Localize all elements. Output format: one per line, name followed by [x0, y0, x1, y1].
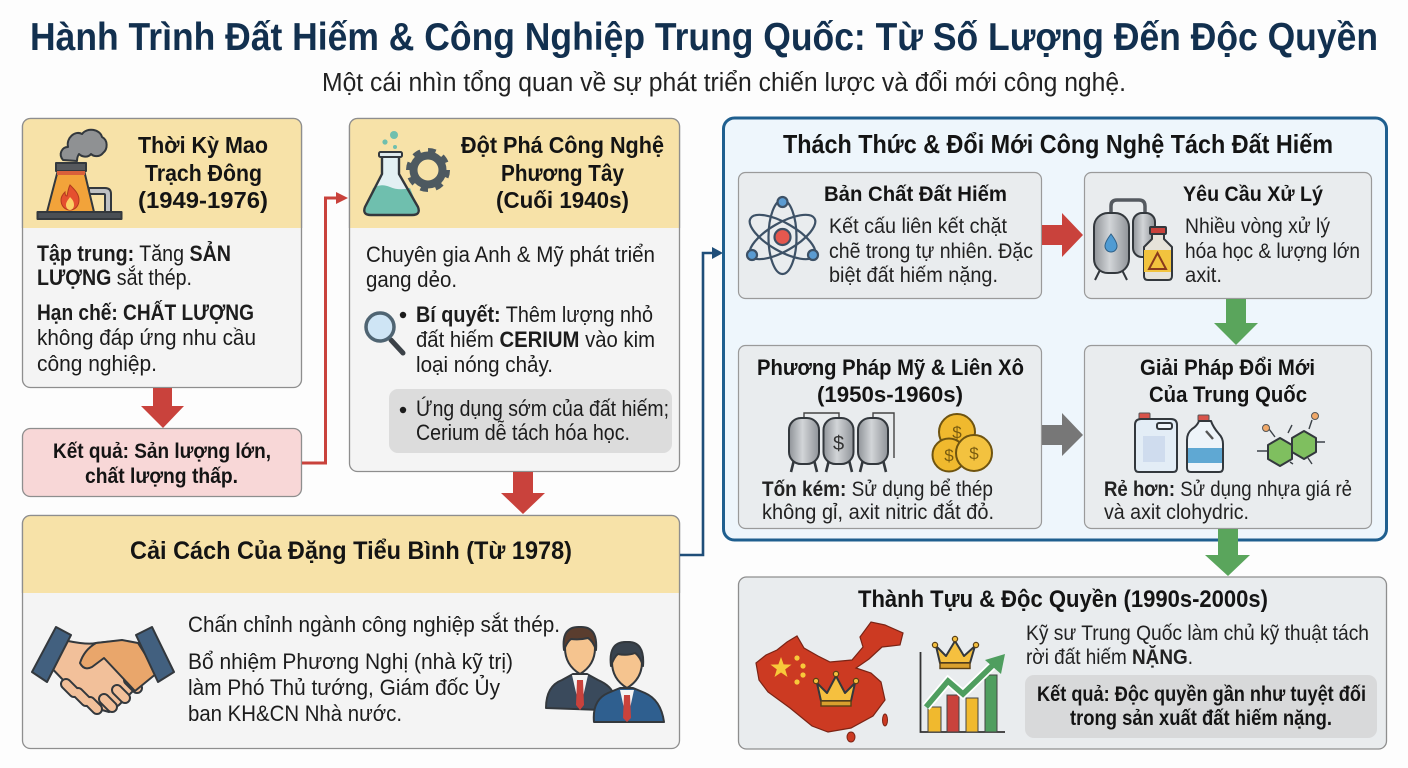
- panel: processing requirements: [1084, 172, 1372, 298]
- icon: China map with crown: [756, 622, 903, 742]
- panel: western breakthrough: [350, 118, 680, 472]
- heading: separation challenges: Thách Thức & Đổi Mới Công Nghệ Tách Đất Hiếm: [783, 129, 1333, 159]
- icon: tanks and acid bottle: [1094, 200, 1172, 280]
- text block: engineers master separation: rời đất hiếm NẶNG.: [1026, 646, 1193, 669]
- text block: cheaper: [1104, 478, 1352, 524]
- callout: early application: Cerium dễ tách hóa học.: [416, 420, 630, 445]
- panel: Mao era: [22, 118, 302, 388]
- icon: handshake: [32, 627, 174, 712]
- callout: monopoly result: trong sản xuất đất hiếm nặng.: [1070, 706, 1332, 730]
- icon: two officials: [546, 627, 664, 722]
- icon: magnifier: [366, 313, 403, 353]
- text block: focus and limits: Hạn chế: CHẤT LƯỢNG: [37, 300, 254, 325]
- text block: focus and limits: LƯỢNG sắt thép.: [37, 265, 192, 290]
- panel: result low quality: Kết quả: Sản lượng lớn,: [53, 439, 271, 463]
- arrow: result to western breakthrough: [302, 192, 348, 463]
- icon: steel tanks: [789, 413, 894, 472]
- panel: separation challenges and innovation: [724, 118, 1386, 540]
- heading: Deng reform: Cải Cách Của Đặng Tiểu Bình (Từ 1978): [130, 537, 572, 565]
- text block: engineers master separation: [1026, 622, 1369, 669]
- text block: steel and Fang Yi: Bổ nhiệm Phương Nghị (nhà kỹ trị): [188, 649, 513, 674]
- text block: acid rounds: axit.: [1185, 264, 1222, 287]
- text block: cerium secret: [400, 302, 655, 377]
- text block: costly: [762, 478, 994, 524]
- panel: Deng reform: [22, 516, 680, 748]
- heading: western breakthrough: [461, 132, 664, 213]
- heading: achievements: Thành Tựu & Độc Quyền (1990s-2000s): [858, 586, 1268, 613]
- icon: steel tanks: $: [833, 433, 844, 455]
- text block: engineers master separation: Kỹ sư Trung Quốc làm chủ kỹ thuật tách: [1026, 622, 1369, 645]
- heading: Mao era: Thời Kỳ Mao: [138, 132, 268, 158]
- text block: cheaper: Rẻ hơn: Sử dụng nhựa giá rẻ: [1104, 478, 1352, 501]
- icon: gold coins: $: [944, 446, 954, 465]
- text block: acid rounds: [1185, 215, 1360, 287]
- panel: result low quality: [22, 428, 302, 496]
- text block: focus and limits: [37, 241, 256, 376]
- icon: gold coins: $: [952, 423, 962, 442]
- heading: US and Soviet method: [757, 355, 1024, 407]
- arrow: breakthrough to reform: [501, 472, 545, 514]
- callout: early application: Ứng dụng sớm của đất hiếm;: [416, 396, 669, 421]
- text block: focus and limits: Tập trung: Tăng SẢN: [37, 241, 231, 266]
- panel: Chinese innovation: [1084, 346, 1372, 528]
- icon: molecule: [1257, 412, 1325, 466]
- arrow: Chinese solution to achievements: [1205, 529, 1250, 576]
- text block: cerium secret: Bí quyết: Thêm lượng nhỏ: [416, 302, 653, 327]
- icon: factory with smoke and flame: [38, 130, 122, 219]
- arrow: nature to processing: [1042, 213, 1083, 257]
- icon: plastic jugs: [1135, 413, 1223, 472]
- heading: processing requirements: Yêu Cầu Xử Lý: [1183, 182, 1323, 206]
- heading: nature of rare earths: Bản Chất Đất Hiếm: [824, 182, 1007, 206]
- text block: steel and Fang Yi: ban KH&CN Nhà nước.: [188, 701, 402, 726]
- heading: Chinese innovation: Giải Pháp Đổi Mới: [1140, 355, 1315, 380]
- text block: steel and Fang Yi: Chấn chỉnh ngành công nghiệp sắt thép.: [188, 612, 560, 637]
- icon: atom: [743, 197, 822, 274]
- text block: steel and Fang Yi: làm Phó Thủ tướng, Giám đốc Ủy: [188, 675, 500, 700]
- heading: Mao era: Trạch Đông: [145, 160, 262, 186]
- panel: nature of rare earths: [738, 172, 1042, 298]
- text block: acid rounds: Nhiều vòng xử lý: [1185, 215, 1330, 238]
- panel: achievements and monopoly: [738, 577, 1386, 749]
- subtitle: Một cái nhìn tổng quan về sự phát triển chiến lược và đổi mới công nghệ.: [322, 69, 1126, 97]
- icon: flask and gear: [364, 131, 448, 215]
- text block: tight bonds: biệt đất hiếm nặng.: [829, 264, 998, 287]
- text block: focus and limits: không đáp ứng nhu cầu: [37, 325, 256, 350]
- arrow: Mao era to result: [141, 388, 184, 428]
- text block: ductile iron: gang dẻo.: [366, 267, 457, 292]
- heading: US and Soviet method: (1950s-1960s): [817, 382, 963, 407]
- arrow: processing to Chinese solution: [1214, 299, 1258, 345]
- arrow: US method to Chinese solution: [1042, 413, 1083, 456]
- panel: result low quality: chất lượng thấp.: [85, 464, 238, 488]
- text block: ductile iron: Chuyên gia Anh & Mỹ phát triển: [366, 242, 655, 267]
- text block: tight bonds: chẽ trong tự nhiên. Đặc: [829, 240, 1033, 263]
- heading: western breakthrough: Phương Tây: [501, 160, 624, 186]
- heading: Mao era: [138, 132, 268, 213]
- icon: gold coins: [932, 414, 992, 472]
- heading: Chinese innovation: Của Trung Quốc: [1149, 382, 1307, 407]
- text block: cerium secret: loại nóng chảy.: [416, 352, 553, 377]
- text block: ductile iron: [366, 242, 655, 292]
- text block: cerium secret: đất hiếm CERIUM vào kim: [416, 327, 655, 352]
- text block: tight bonds: Kết cấu liên kết chặt: [829, 215, 1007, 238]
- arrow: reform to separation challenge: [680, 247, 723, 555]
- heading: US and Soviet method: Phương Pháp Mỹ & Liên Xô: [757, 355, 1024, 380]
- text block: acid rounds: hóa học & lượng lớn: [1185, 240, 1360, 263]
- text block: costly: không gỉ, axit nitric đắt đỏ.: [762, 501, 994, 524]
- text block: steel and Fang Yi: [188, 612, 560, 726]
- text block: focus and limits: công nghiệp.: [37, 351, 157, 376]
- text block: tight bonds: [829, 215, 1033, 287]
- callout: monopoly result: [1025, 675, 1377, 738]
- heading: Chinese innovation: [1140, 355, 1315, 407]
- text block: cheaper: và axit clohydric.: [1104, 501, 1249, 524]
- callout: early application: [389, 389, 672, 453]
- chart icon: rising bars with crown: [920, 636, 1005, 732]
- heading: western breakthrough: (Cuối 1940s): [496, 187, 629, 213]
- icon: gold coins: $: [969, 444, 979, 463]
- panel: US and Soviet method: [738, 346, 1042, 528]
- heading: western breakthrough: Đột Phá Công Nghệ: [461, 132, 664, 158]
- heading: Mao era: (1949-1976): [138, 187, 268, 213]
- text block: costly: Tốn kém: Sử dụng bể thép: [762, 478, 993, 501]
